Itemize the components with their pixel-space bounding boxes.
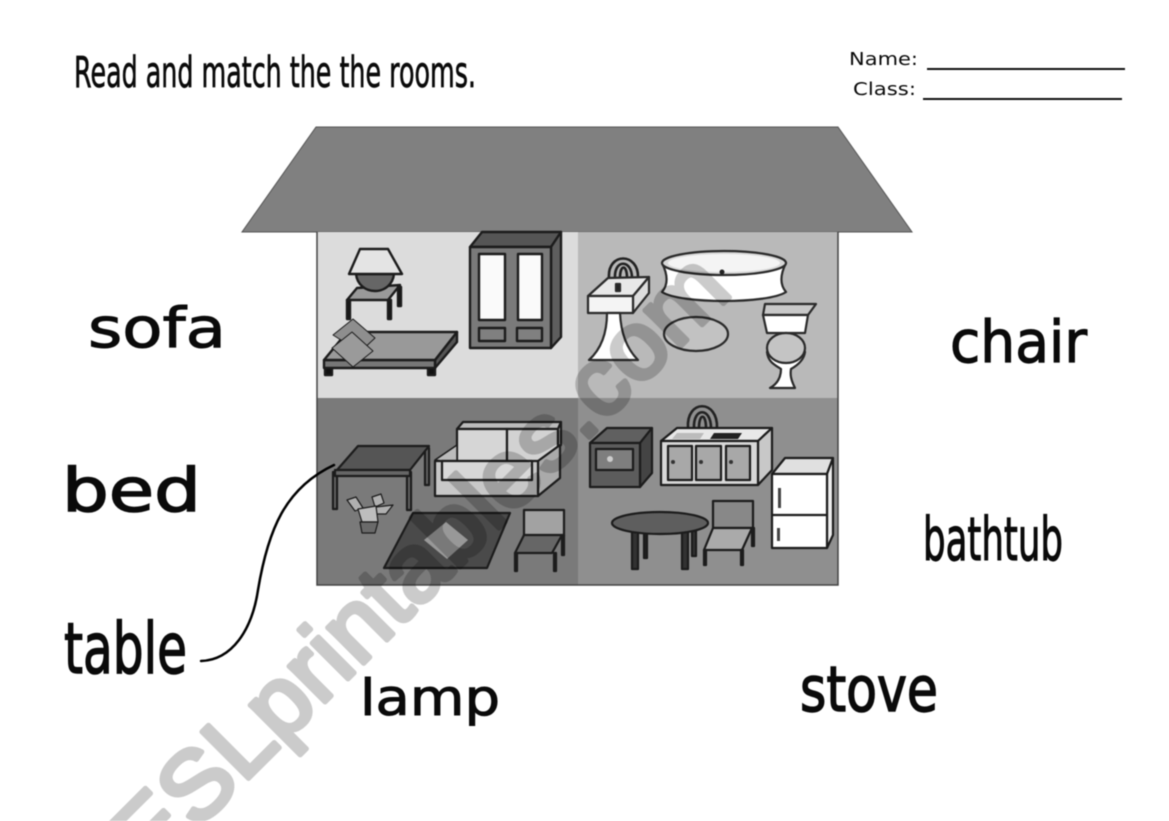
room: living room — [317, 398, 578, 585]
icon: sink — [588, 258, 649, 360]
roof — [242, 127, 912, 232]
icon: dining chair — [704, 501, 754, 565]
icon: wardrobe — [470, 232, 561, 348]
icon: chair — [515, 510, 564, 571]
icon: coffee table — [333, 446, 429, 510]
house outline — [317, 232, 838, 585]
word: stove: stove — [800, 653, 938, 726]
icon: stove — [590, 428, 652, 487]
word: bed: bed — [62, 456, 201, 526]
room: bathroom — [578, 232, 838, 398]
name and class fields — [849, 49, 1125, 100]
icon: lamp on side table — [347, 249, 402, 319]
title: Read and match the the rooms. — [74, 48, 476, 98]
house — [242, 127, 912, 585]
word: lamp: lamp — [360, 669, 500, 727]
word: table: table — [64, 608, 187, 690]
icon: toilet — [763, 304, 816, 388]
name and class fields: Class: — [853, 79, 916, 100]
word: sofa: sofa — [88, 296, 226, 360]
icon: refrigerator — [772, 458, 833, 548]
word: bathtub: bathtub — [923, 505, 1063, 575]
room: kitchen — [578, 398, 838, 585]
room: bedroom — [317, 232, 578, 398]
icon: kitchen cabinet with sink — [661, 406, 772, 485]
icon: bed — [324, 319, 457, 375]
matching line: table — [201, 465, 334, 661]
icon: rug — [384, 513, 510, 568]
word: chair: chair — [950, 308, 1087, 376]
icon: sofa — [435, 422, 561, 496]
icon: bath mat — [664, 317, 728, 351]
icon: dining table — [612, 512, 708, 569]
name and class fields: Name: — [849, 49, 918, 70]
icon: potted plant — [347, 494, 393, 533]
icon: bathtub — [662, 251, 786, 301]
